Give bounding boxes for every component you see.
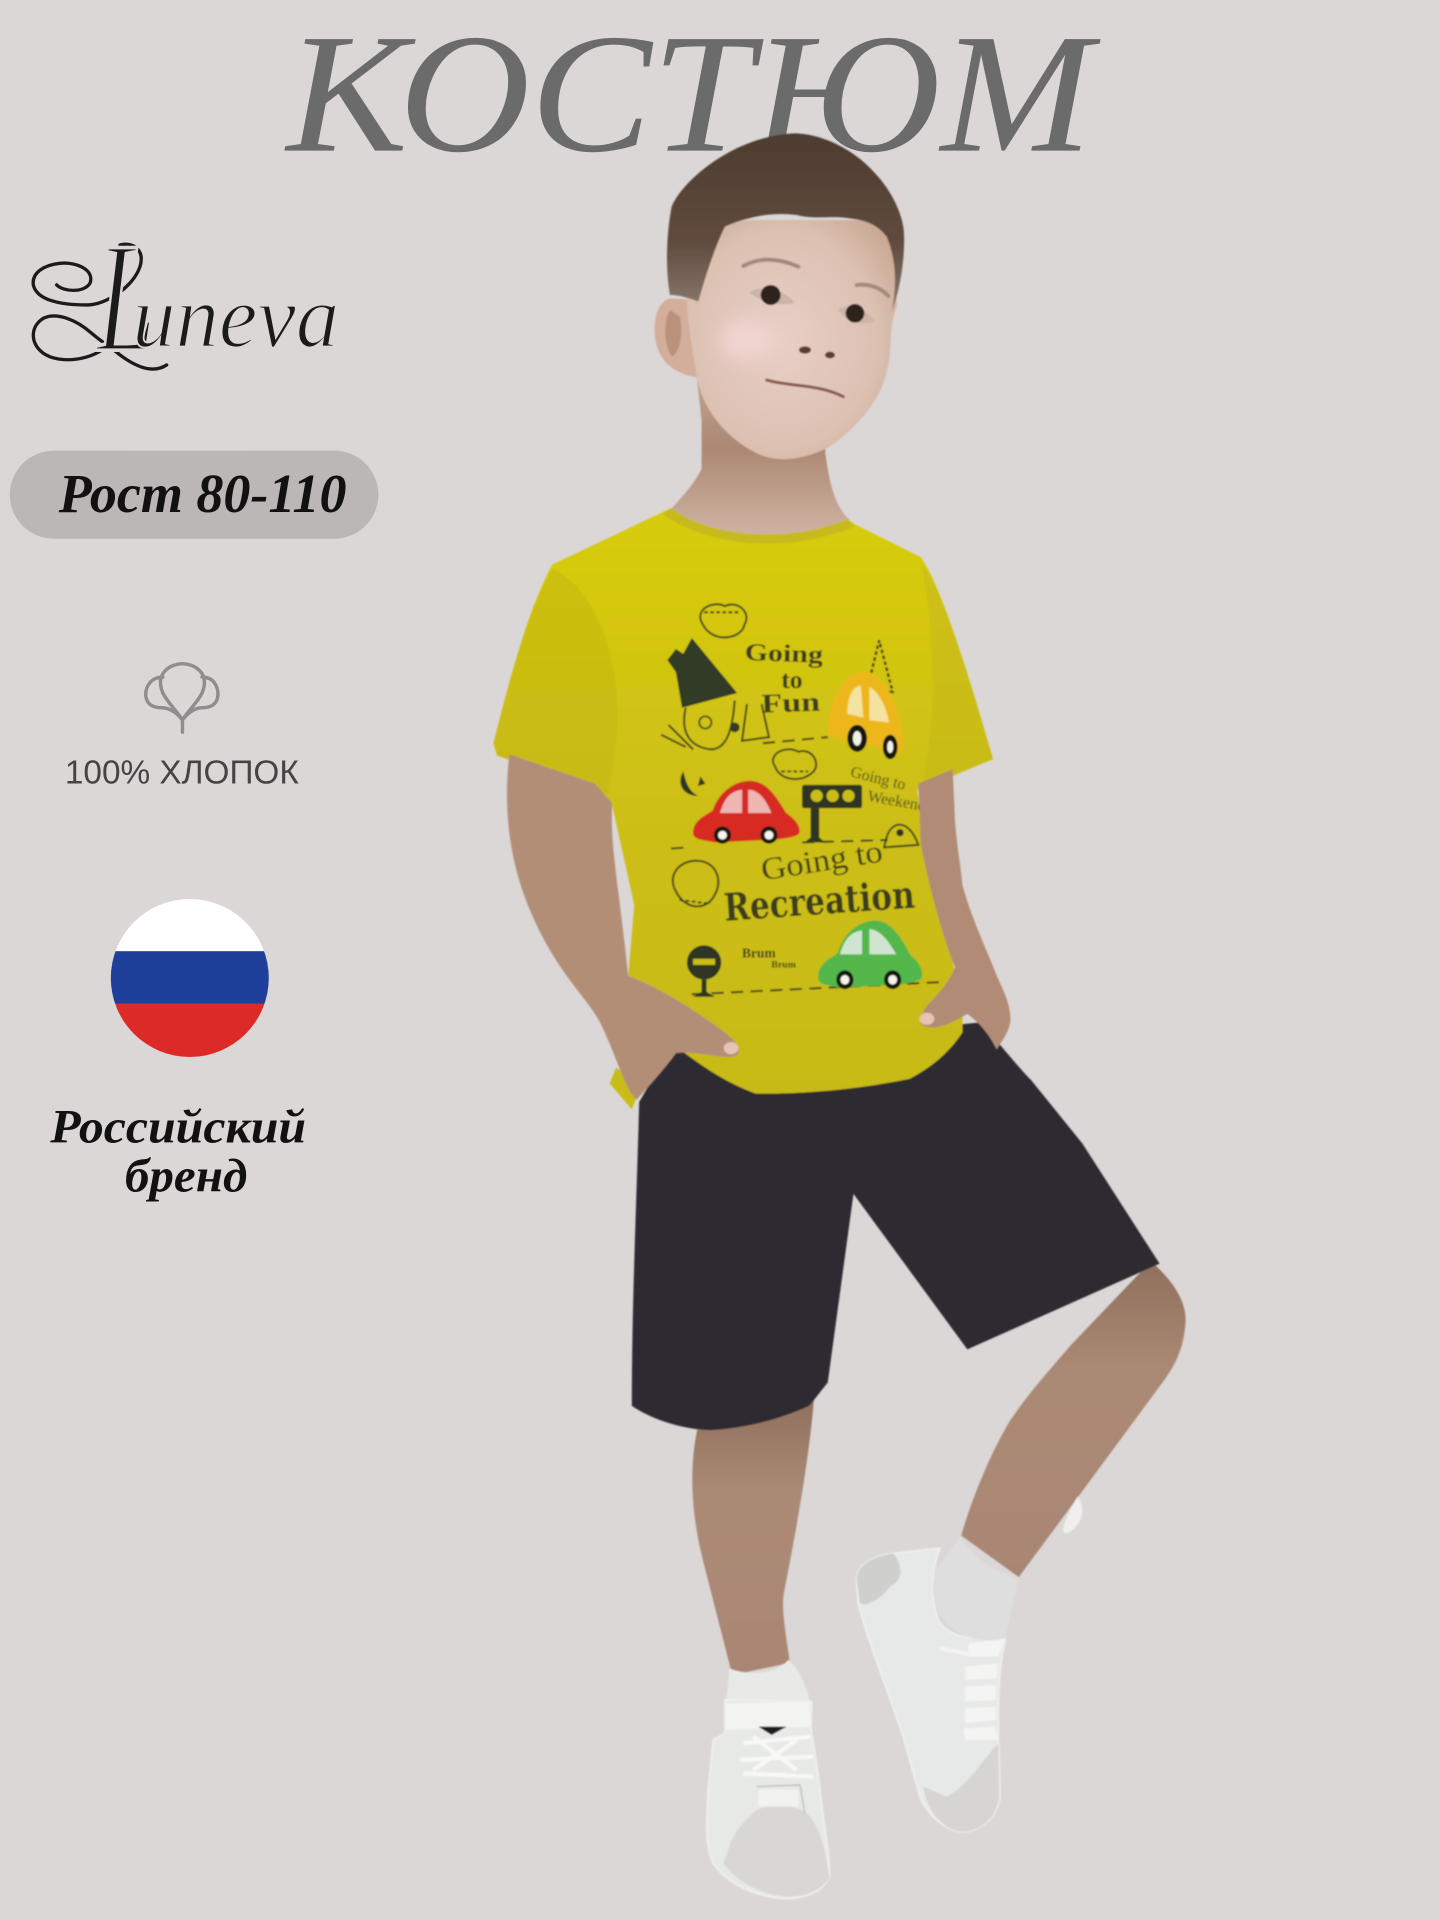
sleeve shading <box>493 569 617 796</box>
neck <box>667 377 850 536</box>
shirt print: road dashes <box>671 737 943 994</box>
photo: boy in suit <box>493 133 1186 1899</box>
shirt print: brum text: Brum <box>771 959 796 970</box>
shirt print: no entry sign <box>687 945 721 997</box>
shirt print: small handwriting: Weekend <box>866 788 927 815</box>
icon: cotton <box>146 664 218 732</box>
nose <box>799 346 835 358</box>
eyebrows <box>743 260 888 296</box>
shirt print: text going to recreation: Going to <box>758 834 885 887</box>
logo: Luneva: uneva <box>132 268 339 367</box>
shirt print: text going to recreation <box>722 834 916 930</box>
brand origin text <box>49 1100 306 1202</box>
cheek blush <box>720 320 773 360</box>
fingernails <box>724 1013 934 1054</box>
eyes <box>749 285 875 323</box>
shirt print: text going to fun <box>744 639 824 719</box>
brand origin text: бренд <box>125 1149 247 1202</box>
left shoe <box>707 1700 829 1899</box>
ear <box>655 298 698 377</box>
height badge <box>10 451 378 539</box>
right arm and hand <box>918 769 1010 1049</box>
shirt print: small handwriting <box>849 764 927 815</box>
left arm and hand <box>507 754 739 1100</box>
cotton label: 100% ХЛОПОК <box>65 755 300 792</box>
height badge: Рост 80-110 <box>58 463 347 524</box>
left sock <box>726 1660 810 1705</box>
collar <box>662 508 855 544</box>
shirt back hem <box>610 1068 642 1109</box>
shirt print: red car <box>693 781 800 844</box>
brand origin text: Российский <box>49 1100 306 1153</box>
head <box>655 133 904 459</box>
logo: Luneva: L <box>95 210 156 384</box>
logo: Luneva <box>33 210 339 384</box>
right sock <box>933 1537 1018 1640</box>
t-shirt <box>493 508 993 1094</box>
right shoe <box>857 1548 1005 1832</box>
icon: russian flag <box>110 899 269 1057</box>
shirt print: green car <box>818 921 922 989</box>
shorts <box>632 1022 1160 1430</box>
shirt print: text going to fun: Fun <box>761 687 821 719</box>
shirt print: yellow car <box>828 672 904 759</box>
face <box>687 220 897 459</box>
shirt print: house <box>661 638 893 749</box>
shoes and socks <box>707 1537 1018 1899</box>
shirt print: brum text <box>742 946 796 970</box>
shirt print: text going to recreation: Recreation <box>722 872 916 930</box>
mouth <box>767 380 843 397</box>
hair <box>667 133 904 312</box>
title: КОСТЮМ <box>284 0 1101 188</box>
shirt print: text going to fun: to <box>781 665 803 694</box>
white spot by leg <box>1063 1496 1082 1533</box>
shirt print: small handwriting: Going to <box>849 764 907 794</box>
shirt print: clouds <box>673 604 816 906</box>
shirt print: moon and flower <box>680 771 918 847</box>
shirt print: traffic signal <box>802 785 862 842</box>
shirt print: text going to fun: Going <box>744 639 824 669</box>
left leg <box>692 1396 814 1675</box>
shirt print: brum text: Brum <box>742 946 776 961</box>
right leg <box>961 1261 1186 1577</box>
